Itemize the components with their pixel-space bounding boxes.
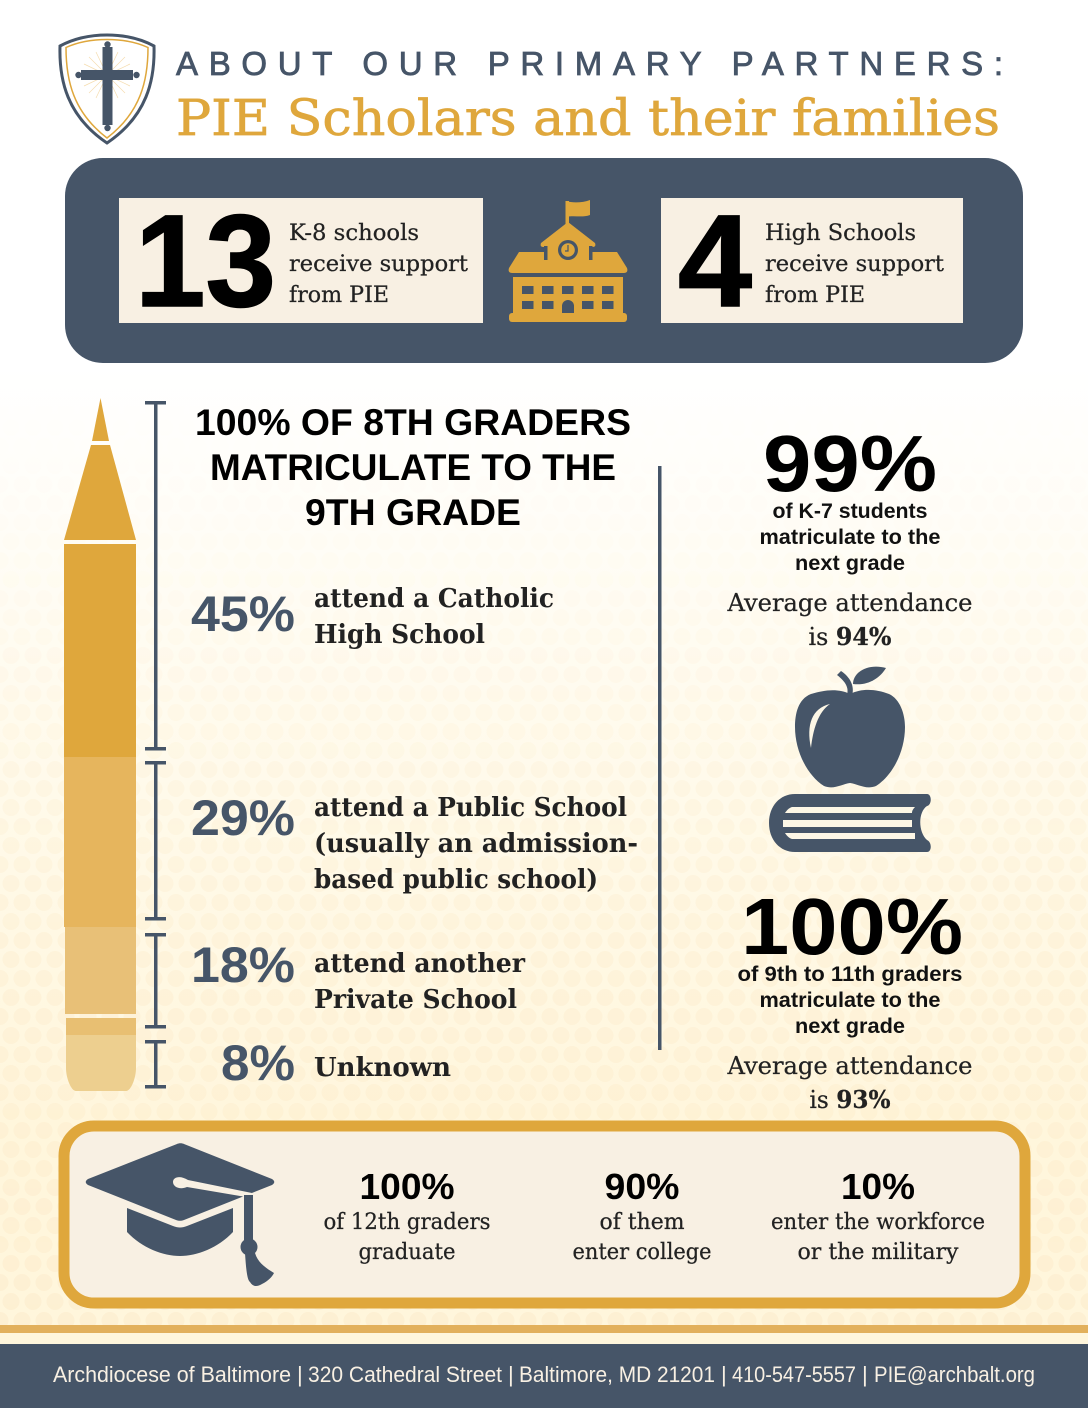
logo: shield with cross: [60, 35, 154, 143]
stat: 10% workforce: or the military: [798, 1240, 959, 1265]
stat: 99% K-7: matriculate to the: [760, 526, 940, 549]
stat card: 13 K-8 schools: [119, 187, 483, 334]
stat: 10% workforce: [771, 1166, 985, 1265]
stat: 99% K-7: is 94%: [808, 622, 892, 651]
stat: 100% graduate: graduate: [358, 1240, 456, 1265]
stat card: 13 K-8 schools: receive support: [289, 252, 468, 277]
pencil chart: [64, 398, 136, 1091]
brackets: [145, 401, 166, 1088]
stat: 100% 9th to 11th: next grade: [795, 1015, 905, 1038]
icon: graduation cap: [86, 1143, 274, 1286]
stat: 90% college: enter college: [572, 1240, 712, 1265]
stat: 29% public: 29%: [191, 790, 295, 846]
stat card: 13 K-8 schools: 13: [135, 187, 276, 334]
panel: graduation outcomes: [64, 1126, 1025, 1303]
stat: 29% public: [191, 790, 638, 895]
stat: 100% 9th to 11th: matriculate to the: [760, 989, 940, 1012]
stat: 18% private: [191, 937, 525, 1015]
stat card: 4 high schools: [661, 187, 963, 334]
footer: |: [862, 1362, 868, 1387]
stat: 100% graduate: [324, 1166, 490, 1265]
stat: 8% unknown: [221, 1035, 451, 1091]
stat: 18% private: attend another: [314, 949, 525, 979]
stat: 45% catholic: High School: [314, 620, 485, 650]
footer: 320 Cathedral Street: [308, 1362, 502, 1387]
stat: 45% catholic: 45%: [191, 586, 295, 642]
stat: 100% graduate: 100%: [360, 1166, 454, 1207]
stat: 10% workforce: enter the workforce: [771, 1210, 985, 1235]
stat card: 4 high schools: from PIE: [765, 283, 865, 308]
stat: 45% catholic: [191, 584, 554, 650]
stat: 45% catholic: attend a Catholic: [314, 584, 554, 614]
heading: 100% of 8th graders: MATRICULATE TO THE: [210, 447, 616, 488]
heading: 100% of 8th graders: 9TH GRADE: [305, 492, 521, 533]
panel: school counts: [65, 158, 1023, 363]
heading: 100% of 8th graders: 100% OF 8TH GRADERS: [195, 402, 631, 443]
icon: apple on books: [769, 667, 931, 852]
footer: [0, 1344, 1088, 1408]
footer: Archdiocese of Baltimore: [53, 1362, 291, 1387]
stat: 29% public: attend a Public School: [314, 793, 627, 823]
footer: |: [721, 1362, 727, 1387]
stat: 99% K-7: Average attendance: [726, 589, 972, 617]
stat: 99% K-7: next grade: [795, 552, 905, 575]
footer: |: [297, 1362, 303, 1387]
heading: about our primary partners: ABOUT OUR PRIMARY PARTNERS:: [176, 45, 1003, 82]
footer: PIE@archbalt.org: [874, 1362, 1035, 1387]
stat: 99% K-7: of K-7 students: [772, 500, 928, 523]
stat: 100% 9th to 11th: of 9th to 11th graders: [738, 963, 962, 986]
stat: 90% college: of them: [600, 1210, 685, 1235]
footer: 410-547-5557: [732, 1362, 856, 1387]
stat: 8% unknown: Unknown: [314, 1053, 451, 1083]
stat: 99% K-7: 99%: [763, 419, 937, 508]
footer: Baltimore, MD 21201: [519, 1362, 715, 1387]
stat: 100% graduate: of 12th graders: [324, 1210, 490, 1235]
stat card: 4 high schools: receive support: [765, 252, 944, 277]
stat: 29% public: based public school): [314, 865, 598, 895]
stat: 100% 9th to 11th: Average attendance: [726, 1052, 972, 1080]
icon: schoolhouse: [509, 200, 627, 322]
heading: 100% of 8th graders: [195, 402, 631, 533]
stat: 18% private: 18%: [191, 937, 295, 993]
stat: 100% 9th to 11th: [726, 882, 972, 1114]
stat card: 4 high schools: High Schools: [765, 221, 916, 246]
heading: PIE Scholars and their families: PIE Scholars and their families: [176, 89, 1000, 147]
stat: 8% unknown: 8%: [221, 1035, 295, 1091]
stat card: 13 K-8 schools: K-8 schools: [289, 221, 419, 246]
stat: 99% K-7: [726, 419, 972, 651]
stat: 29% public: (usually an admission-: [314, 829, 638, 859]
stat: 100% 9th to 11th: 100%: [741, 882, 963, 971]
stat: 90% college: [572, 1166, 712, 1265]
stat: 100% 9th to 11th: is 93%: [810, 1085, 891, 1114]
stat: 10% workforce: 10%: [841, 1166, 915, 1207]
stat: 18% private: Private School: [314, 985, 517, 1015]
stat: 90% college: 90%: [604, 1166, 680, 1207]
footer: |: [508, 1362, 514, 1387]
stat card: 4 high schools: 4: [678, 187, 752, 334]
stat card: 13 K-8 schools: from PIE: [289, 283, 389, 308]
